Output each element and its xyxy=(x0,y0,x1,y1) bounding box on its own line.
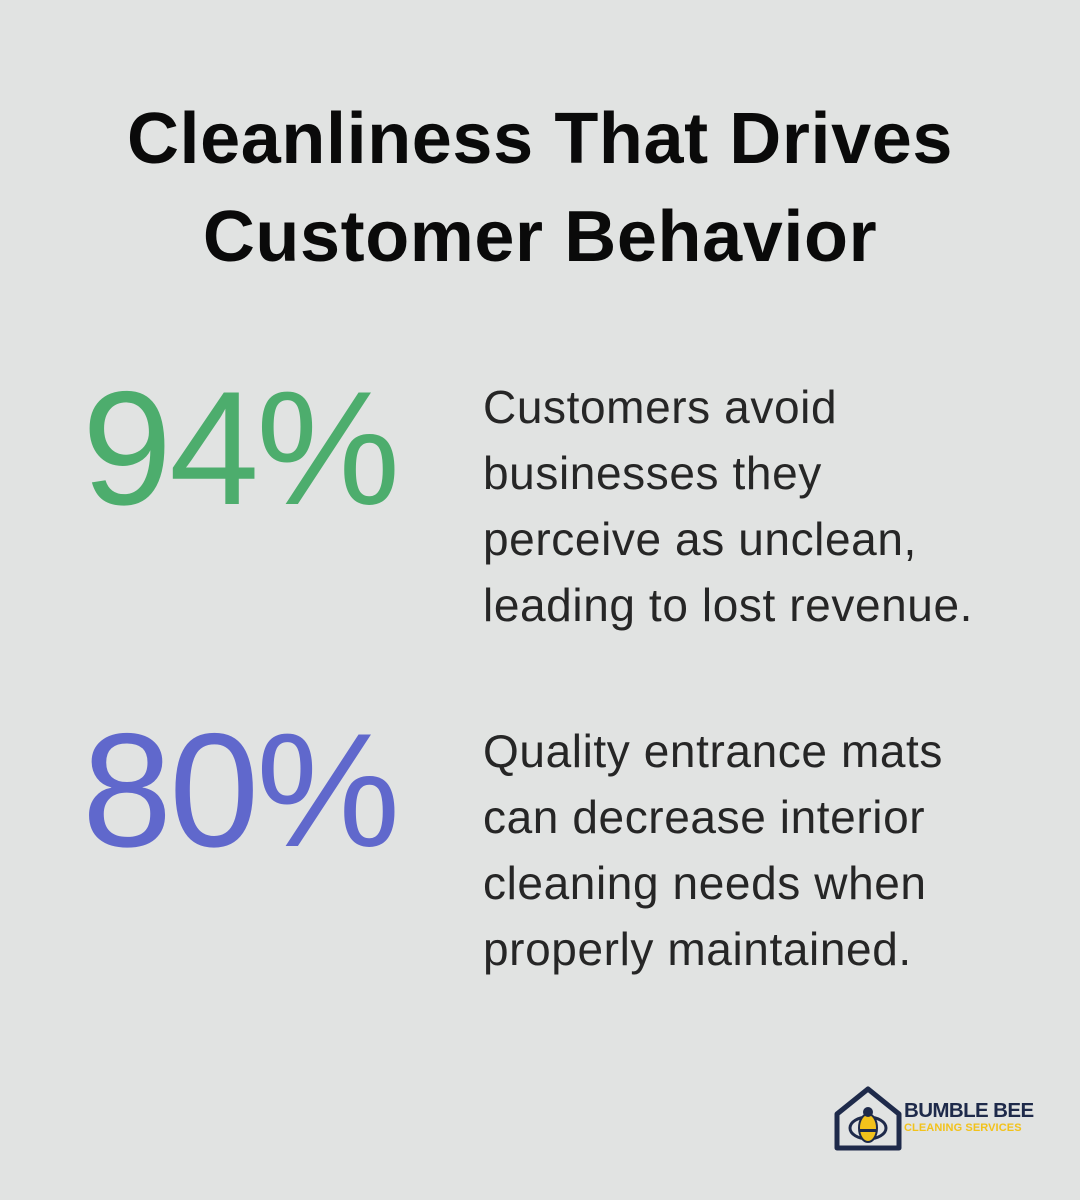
logo text: BUMBLE BEE xyxy=(904,1099,1034,1122)
stat 1 description: perceive as unclean, xyxy=(483,513,917,565)
stat 1 number: 94% xyxy=(82,358,397,539)
logo text: CLEANING SERVICES xyxy=(904,1122,1022,1134)
stat 1 description: businesses they xyxy=(483,447,822,499)
title: Cleanliness That Drives xyxy=(127,99,953,179)
stat 1 description: leading to lost revenue. xyxy=(483,579,973,631)
stat 2 description: Quality entrance mats xyxy=(483,725,943,777)
stat 2 description: properly maintained. xyxy=(483,923,912,975)
stat 1 description: Customers avoid xyxy=(483,381,837,433)
stat 2 description: cleaning needs when xyxy=(483,857,927,909)
stat 2 description: can decrease interior xyxy=(483,791,925,843)
stat 2 number: 80% xyxy=(82,700,397,881)
title: Customer Behavior xyxy=(203,197,877,277)
stat 1 description xyxy=(483,381,973,631)
title xyxy=(127,99,953,277)
logo xyxy=(834,1086,1034,1150)
icon: bee house xyxy=(834,1086,902,1150)
stat 2 description xyxy=(483,725,943,975)
logo text xyxy=(904,1099,1034,1134)
